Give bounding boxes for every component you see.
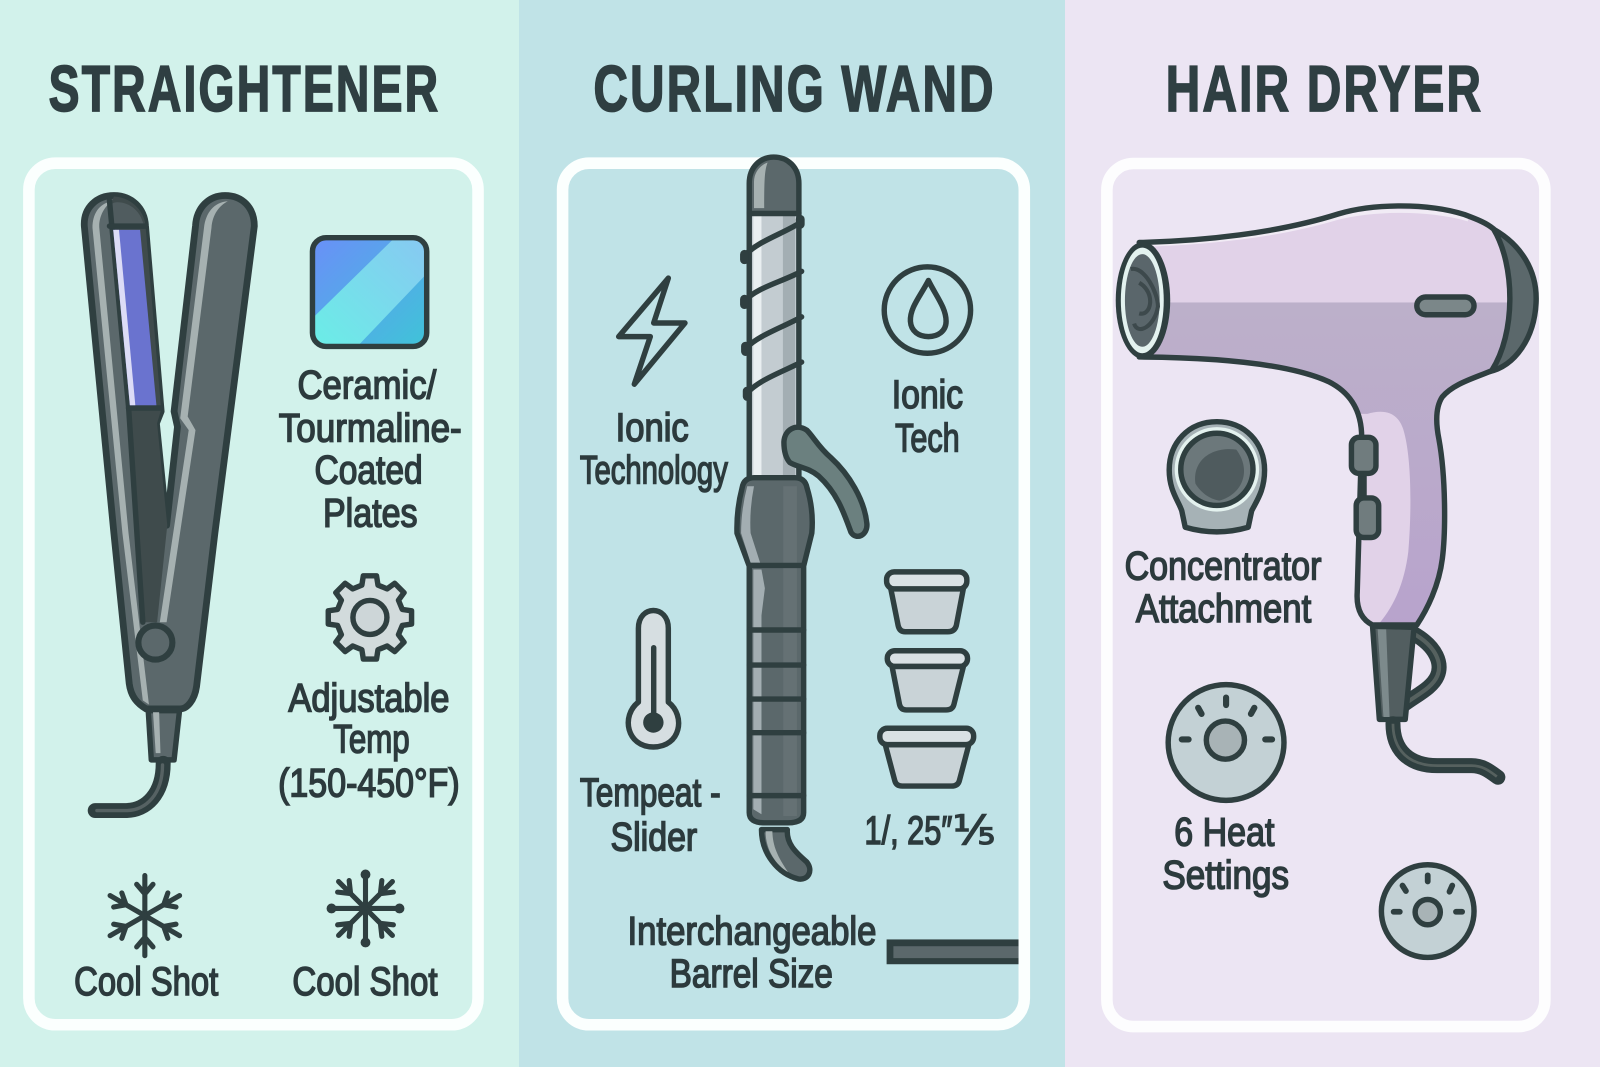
helix [744, 223, 802, 393]
label: tempeat slider [580, 770, 721, 859]
label: adjustable temp [278, 676, 460, 806]
label: heat settings: Settings [1162, 852, 1289, 897]
cord loop [1403, 634, 1439, 705]
icon: snowflake right [329, 872, 402, 945]
label: concentrator attachment: Attachment [1136, 586, 1311, 631]
icon: heat dial large [1168, 685, 1284, 800]
panel: straightener [0, 0, 520, 1067]
barrel [749, 212, 799, 481]
nozzle [1116, 242, 1170, 359]
label: heat settings: 6 Heat [1174, 810, 1274, 855]
label: cool shot right: Cool Shot [292, 959, 438, 1004]
card frame: straightener [29, 163, 478, 1025]
bottom tip [761, 830, 810, 879]
label: ceramic plates [279, 362, 462, 535]
card frame: hair dryer [1107, 163, 1545, 1027]
label: ionic technology [580, 405, 728, 492]
rear cap [1488, 226, 1536, 372]
label: ionic technology: Ionic [616, 405, 689, 450]
label: barrel sizes: ⅕ [953, 808, 995, 853]
label: ceramic plates: Plates [323, 490, 418, 535]
icon: barrel cup medium [887, 651, 968, 710]
label: tempeat slider: Tempeat - [580, 770, 721, 815]
icon: ceramic plate [312, 238, 428, 347]
label: cool shot left: Cool Shot [74, 959, 218, 1004]
icon: water drop [884, 267, 971, 353]
heading: curling wand: CURLING WAND [594, 53, 996, 125]
label: interchangeable barrel size [628, 909, 876, 996]
icon: snowflake left [106, 876, 184, 956]
label: heat settings [1162, 810, 1289, 897]
heading: hair dryer: HAIR DRYER [1166, 52, 1483, 125]
plate on iron [113, 230, 156, 405]
label: interchangeable barrel size: Interchangeable [628, 909, 876, 954]
icon: lightning bolt [619, 278, 685, 384]
tip [749, 157, 799, 214]
label: ionic technology: Technology [580, 447, 728, 492]
panel: curling wand [519, 0, 1065, 1067]
icon: thermometer [628, 610, 679, 747]
label: adjustable temp: (150-450°F) [278, 761, 460, 806]
icon: concentrator attachment [1169, 422, 1265, 532]
label: adjustable temp: Temp [333, 716, 410, 761]
body [1139, 206, 1510, 625]
card frame: curling wand [563, 163, 1024, 1025]
label: adjustable temp: Adjustable [288, 676, 449, 721]
label: ceramic plates: Tourmaline- [279, 405, 462, 450]
illustration: hair dryer [1116, 206, 1536, 777]
icon: barrel cup small [887, 572, 967, 632]
pivot [138, 626, 172, 660]
label: tempeat slider: Slider [611, 814, 697, 859]
icon: heat dial small [1381, 865, 1474, 957]
icon: gear [328, 576, 412, 659]
power switch [1417, 297, 1474, 315]
label: interchangeable barrel size: Barrel Size [670, 951, 833, 996]
panel: hair dryer [1101, 65, 1550, 1032]
illustration: straightener [84, 196, 254, 811]
cord buttons [1356, 472, 1372, 499]
icon: barrel bar [887, 939, 1019, 964]
icon: barrel cup large [880, 728, 974, 786]
label: ceramic plates: Coated [315, 447, 423, 492]
label: concentrator attachment [1125, 543, 1321, 631]
neck [148, 711, 180, 760]
cord [1393, 724, 1498, 777]
label: ionic tech: Tech [895, 416, 960, 461]
label: ionic tech: Ionic [892, 372, 963, 417]
label: barrel sizes: 1/, 25″ [865, 808, 952, 853]
clamp [784, 427, 867, 536]
handle [737, 478, 812, 823]
heading: straightener: STRAIGHTENER [49, 53, 440, 125]
label: ceramic plates: Ceramic/ [298, 362, 437, 407]
cord [95, 763, 163, 811]
neck [1373, 626, 1414, 719]
label: ionic tech [892, 372, 963, 461]
label: concentrator attachment: Concentrator [1125, 543, 1321, 588]
illustration: curling wand [737, 157, 867, 879]
